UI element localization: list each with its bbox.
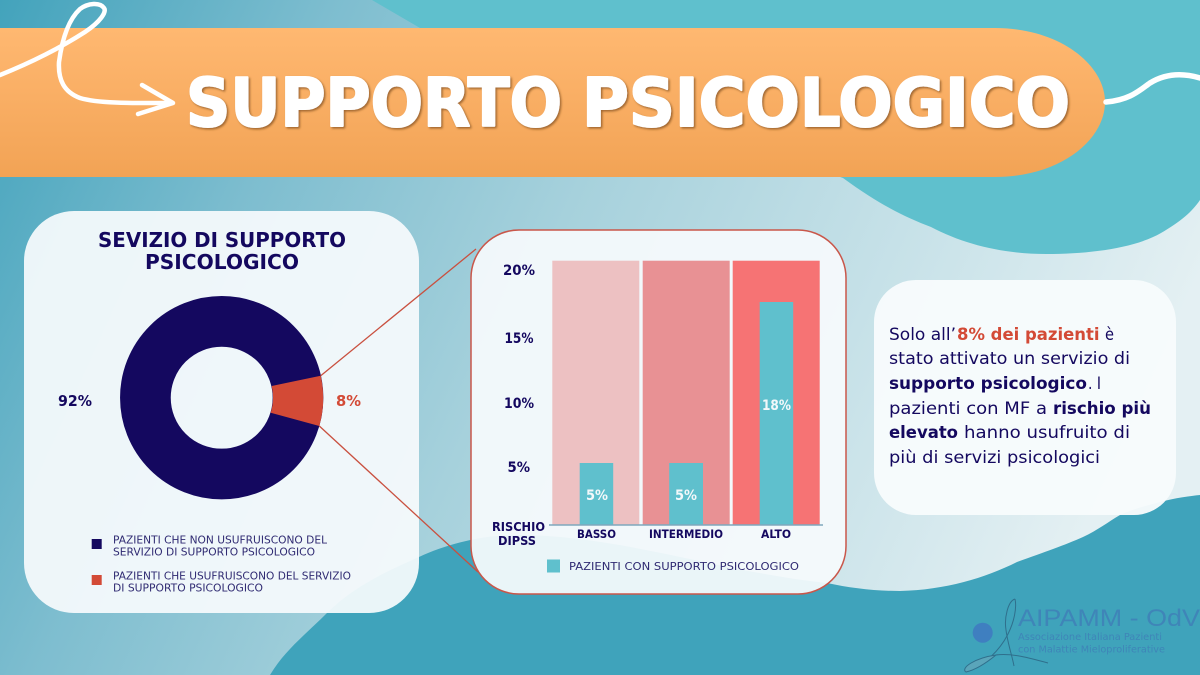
category labels <box>577 527 791 541</box>
y axis labels: 5% <box>508 460 530 476</box>
logo tagline: Associazione Italiana Pazienti <box>1018 632 1162 643</box>
callout text: 8% dei pazienti <box>957 325 1100 344</box>
category labels: INTERMEDIO <box>649 527 723 541</box>
legend: PAZIENTI CHE NON USUFRUISCONO DEL <box>113 534 327 546</box>
title: SUPPORTO <box>186 64 562 142</box>
bars <box>580 302 793 525</box>
axis title: RISCHIO <box>492 520 545 534</box>
callout text: supporto psicologico <box>889 374 1087 393</box>
category labels: BASSO <box>577 527 616 541</box>
axis title: DIPSS <box>498 534 536 548</box>
legend <box>92 534 351 594</box>
bar values <box>586 398 791 504</box>
y axis labels: 20% <box>503 263 535 279</box>
title <box>186 64 1070 142</box>
logo mark <box>965 599 1048 672</box>
bar values: 18% <box>762 398 791 414</box>
logo name: AIPAMM - OdV <box>1018 605 1200 632</box>
callout text: elevato <box>889 423 958 442</box>
callout text: rischio più <box>1053 399 1151 418</box>
logo tagline <box>1018 632 1165 656</box>
axis line <box>549 524 823 526</box>
callout text: pazienti con MF a <box>889 399 1047 418</box>
decorative arrow line <box>0 4 1200 114</box>
label 92%: 92% <box>58 392 92 410</box>
legend: SERVIZIO DI SUPPORTO PSICOLOGICO <box>113 546 315 558</box>
risk columns <box>552 261 820 525</box>
title banner <box>0 28 1105 177</box>
category labels: ALTO <box>761 527 791 541</box>
callout text <box>889 325 1151 467</box>
logo: AIPAMM <box>965 599 1200 672</box>
bar values: 5% <box>675 488 697 504</box>
chart heading: SEVIZIO DI SUPPORTO <box>98 228 346 252</box>
logo tagline: con Malattie Mieloproliferative <box>1018 644 1165 656</box>
panel: text callout <box>874 280 1176 515</box>
connector lines <box>319 249 478 572</box>
panel: bar chart <box>471 230 846 594</box>
callout text: più di servizi psicologici <box>889 448 1100 467</box>
callout text: stato attivato un servizio di <box>889 349 1130 368</box>
chart heading <box>98 228 346 274</box>
axis title <box>492 520 545 548</box>
donut chart <box>145 321 323 474</box>
label 8%: 8% <box>336 392 361 410</box>
legend: PAZIENTI CHE USUFRUISCONO DEL SERVIZIO <box>113 570 351 582</box>
callout text: hanno usufruito di <box>964 423 1130 442</box>
bar values: 5% <box>586 488 608 504</box>
y axis labels: 15% <box>504 331 534 347</box>
title: PSICOLOGICO <box>582 64 1070 142</box>
y axis labels <box>503 263 535 476</box>
bar legend: PAZIENTI CON SUPPORTO PSICOLOGICO <box>569 560 799 573</box>
panel: donut chart <box>24 211 419 613</box>
callout text: è <box>1105 325 1114 344</box>
legend: DI SUPPORTO PSICOLOGICO <box>113 582 263 594</box>
y axis labels: 10% <box>504 396 534 412</box>
chart heading: PSICOLOGICO <box>145 250 299 274</box>
callout text: . I <box>1088 374 1101 393</box>
callout text: Solo all’ <box>889 325 956 344</box>
